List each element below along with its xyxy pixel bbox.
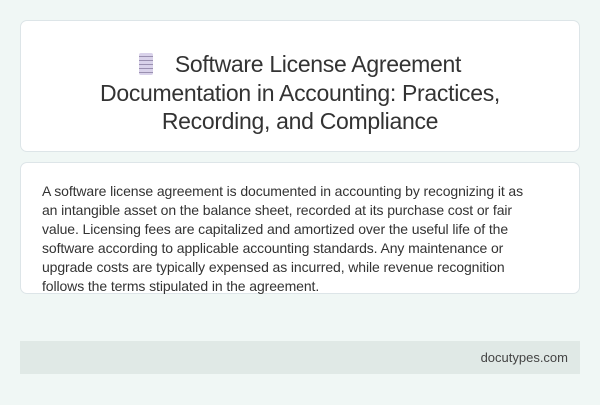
text block: upgrade costs are typically expensed as incurred, while revenue recognition <box>42 259 505 275</box>
title: Recording, and Compliance <box>162 108 438 134</box>
footer text: docutypes.com <box>481 350 568 365</box>
text block: value. Licensing fees are capitalized and amortized over the useful life of the <box>42 221 508 237</box>
footer <box>20 341 580 374</box>
text block: an intangible asset on the balance sheet, recorded at its purchase cost or fair <box>42 202 512 218</box>
title: Documentation in Accounting: Practices, <box>100 80 500 106</box>
text block <box>42 183 523 294</box>
text block: follows the terms stipulated in the agreement. <box>42 278 319 294</box>
title: Software License Agreement <box>175 51 461 77</box>
icon: document <box>139 53 153 75</box>
text block: software according to applicable accounting standards. Any maintenance or <box>42 240 503 256</box>
panel: title <box>20 20 580 152</box>
panel: description <box>20 162 580 294</box>
title <box>100 51 500 134</box>
text block: A software license agreement is documented in accounting by recognizing it as <box>42 183 523 199</box>
